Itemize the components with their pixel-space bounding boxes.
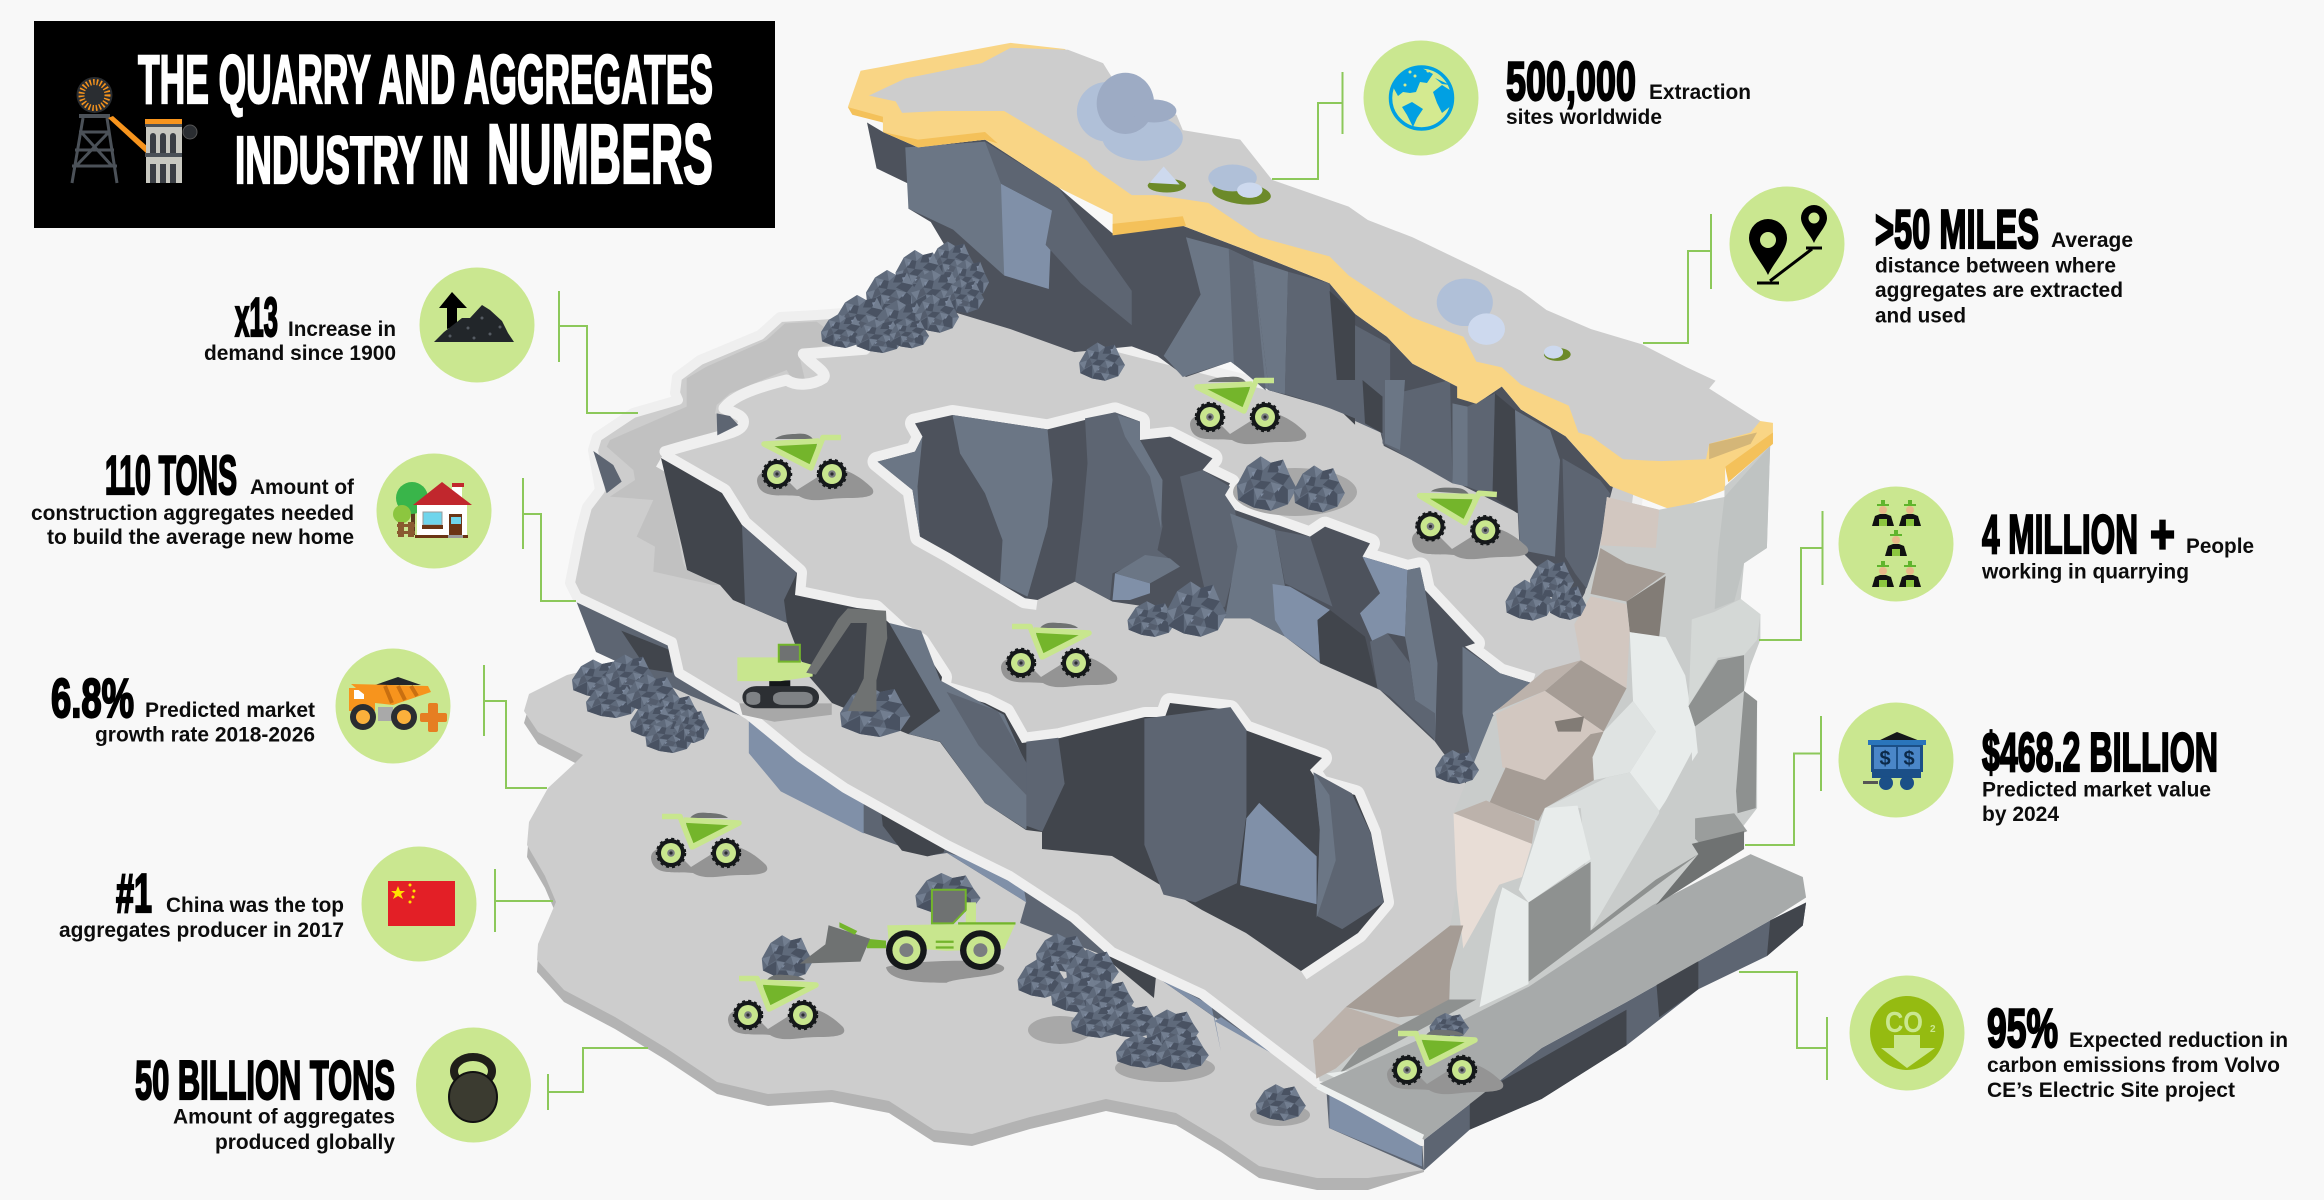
text: People	[2186, 535, 2254, 558]
text: Average	[2051, 229, 2133, 252]
excavator	[737, 608, 887, 722]
text: 50 BILLION TONS	[135, 1049, 395, 1111]
text: carbon emissions from Volvo	[1987, 1054, 2280, 1077]
text: Increase in	[288, 318, 396, 341]
connector	[495, 869, 553, 932]
text: +	[2150, 503, 2175, 565]
text: 110 TONS	[105, 444, 237, 506]
title text: NUMBERS	[487, 107, 713, 201]
title text	[138, 41, 713, 201]
connector	[523, 478, 576, 601]
text: by 2024	[1982, 803, 2059, 826]
connector	[1759, 511, 1822, 640]
connector	[1739, 972, 1827, 1080]
icon: workers	[1838, 486, 1954, 602]
connector	[559, 291, 638, 413]
text	[135, 1049, 395, 1154]
rock piles	[572, 242, 1586, 1126]
boulders	[1077, 82, 1138, 142]
stat: $468.2 billion	[1745, 702, 2218, 845]
bottom terrace surface	[524, 620, 1424, 1178]
stat: 95% reduction	[1739, 972, 2288, 1102]
text	[51, 667, 315, 746]
text: Predicted market value	[1982, 778, 2211, 802]
text	[1506, 50, 1751, 129]
text: working in quarrying	[1981, 560, 2189, 584]
text: 500,000	[1506, 50, 1636, 112]
back cliff	[867, 122, 1615, 620]
connector	[1745, 716, 1821, 845]
title text: INDUSTRY IN	[235, 123, 469, 198]
text	[1982, 721, 2218, 826]
text: China was the top	[166, 894, 344, 917]
icon: mine headframe	[72, 77, 197, 183]
icon: CO2 down arrow: CO	[1885, 1007, 1923, 1039]
icon: map pins	[1730, 186, 1844, 302]
title text: THE QUARRY AND AGGREGATES	[138, 41, 713, 118]
text	[1875, 198, 2133, 328]
icon: coal heap with arrow	[420, 268, 534, 382]
text: distance between where	[1875, 254, 2116, 278]
text: Predicted market	[145, 699, 315, 722]
icon: dump truck with plus	[336, 648, 450, 764]
stat: 50 billion tons	[135, 1028, 648, 1154]
text: demand since 1900	[204, 342, 396, 365]
lower blue cliff	[575, 598, 1424, 1170]
text: >50 MILES	[1875, 198, 2039, 260]
text: to build the average new home	[47, 526, 354, 549]
stat: 6.8% growth	[51, 648, 547, 788]
text: aggregates are extracted	[1875, 279, 2123, 302]
rock shadows	[1028, 468, 1357, 1126]
right rock face	[1313, 446, 1806, 1170]
title banner	[34, 21, 775, 228]
text: Expected reduction in	[2069, 1029, 2288, 1052]
text	[204, 286, 396, 365]
connector	[1272, 72, 1342, 179]
icon: globe	[1364, 40, 1478, 156]
haul trucks	[651, 377, 1528, 1094]
icon: mine cart with dollars: $	[1903, 748, 1915, 770]
icon: house	[376, 454, 492, 568]
text	[31, 444, 355, 549]
icon: kettlebell	[416, 1028, 531, 1142]
text: Amount of	[250, 476, 355, 499]
grey top surface	[869, 48, 1760, 461]
text: aggregates producer in 2017	[59, 919, 344, 942]
icon: China flag	[362, 846, 476, 962]
text: sites worldwide	[1506, 106, 1662, 129]
icon: CO2 down arrow	[1850, 976, 1964, 1090]
connector	[548, 1048, 648, 1110]
icon: mine cart with dollars: $	[1879, 748, 1891, 770]
top terrace	[848, 43, 1773, 511]
text: construction aggregates needed	[31, 502, 354, 525]
wheel loader	[800, 890, 1016, 983]
text: growth rate 2018-2026	[95, 724, 315, 746]
text: Amount of aggregates	[173, 1106, 395, 1128]
stat: 110 tons	[31, 444, 576, 601]
text: 6.8%	[51, 667, 134, 729]
text: 4 MILLION	[1982, 503, 2138, 565]
text: #1	[116, 862, 152, 924]
stat: >50 miles	[1643, 186, 2133, 343]
text: and used	[1875, 304, 1966, 328]
quarry illustration	[524, 43, 1806, 1190]
stat: 500,000 sites	[1272, 40, 1751, 179]
text: Extraction	[1649, 81, 1751, 104]
icon: CO2 down arrow: 2	[1930, 1024, 1936, 1035]
text: produced globally	[215, 1131, 395, 1154]
shaded ledge	[593, 322, 865, 585]
yellow soil band	[848, 43, 1773, 511]
text	[59, 862, 344, 942]
text: x13	[235, 286, 278, 348]
upper pit and central cliff	[878, 412, 1532, 803]
icon: mine cart with dollars	[1838, 702, 1954, 818]
text: CE’s Electric Site project	[1987, 1079, 2235, 1102]
text: 95%	[1987, 997, 2058, 1059]
connector	[1643, 214, 1711, 343]
stat: 4 million people	[1759, 486, 2254, 640]
connector	[484, 665, 547, 788]
bottom ledge	[1424, 903, 1806, 1170]
stat: #1 China	[59, 846, 553, 962]
middle cliff and pit	[661, 458, 1384, 971]
upper terraces surface	[570, 305, 1640, 1141]
bottom terrace edge	[524, 687, 1424, 1190]
stat: x13 demand	[204, 268, 638, 413]
text	[1987, 997, 2288, 1102]
